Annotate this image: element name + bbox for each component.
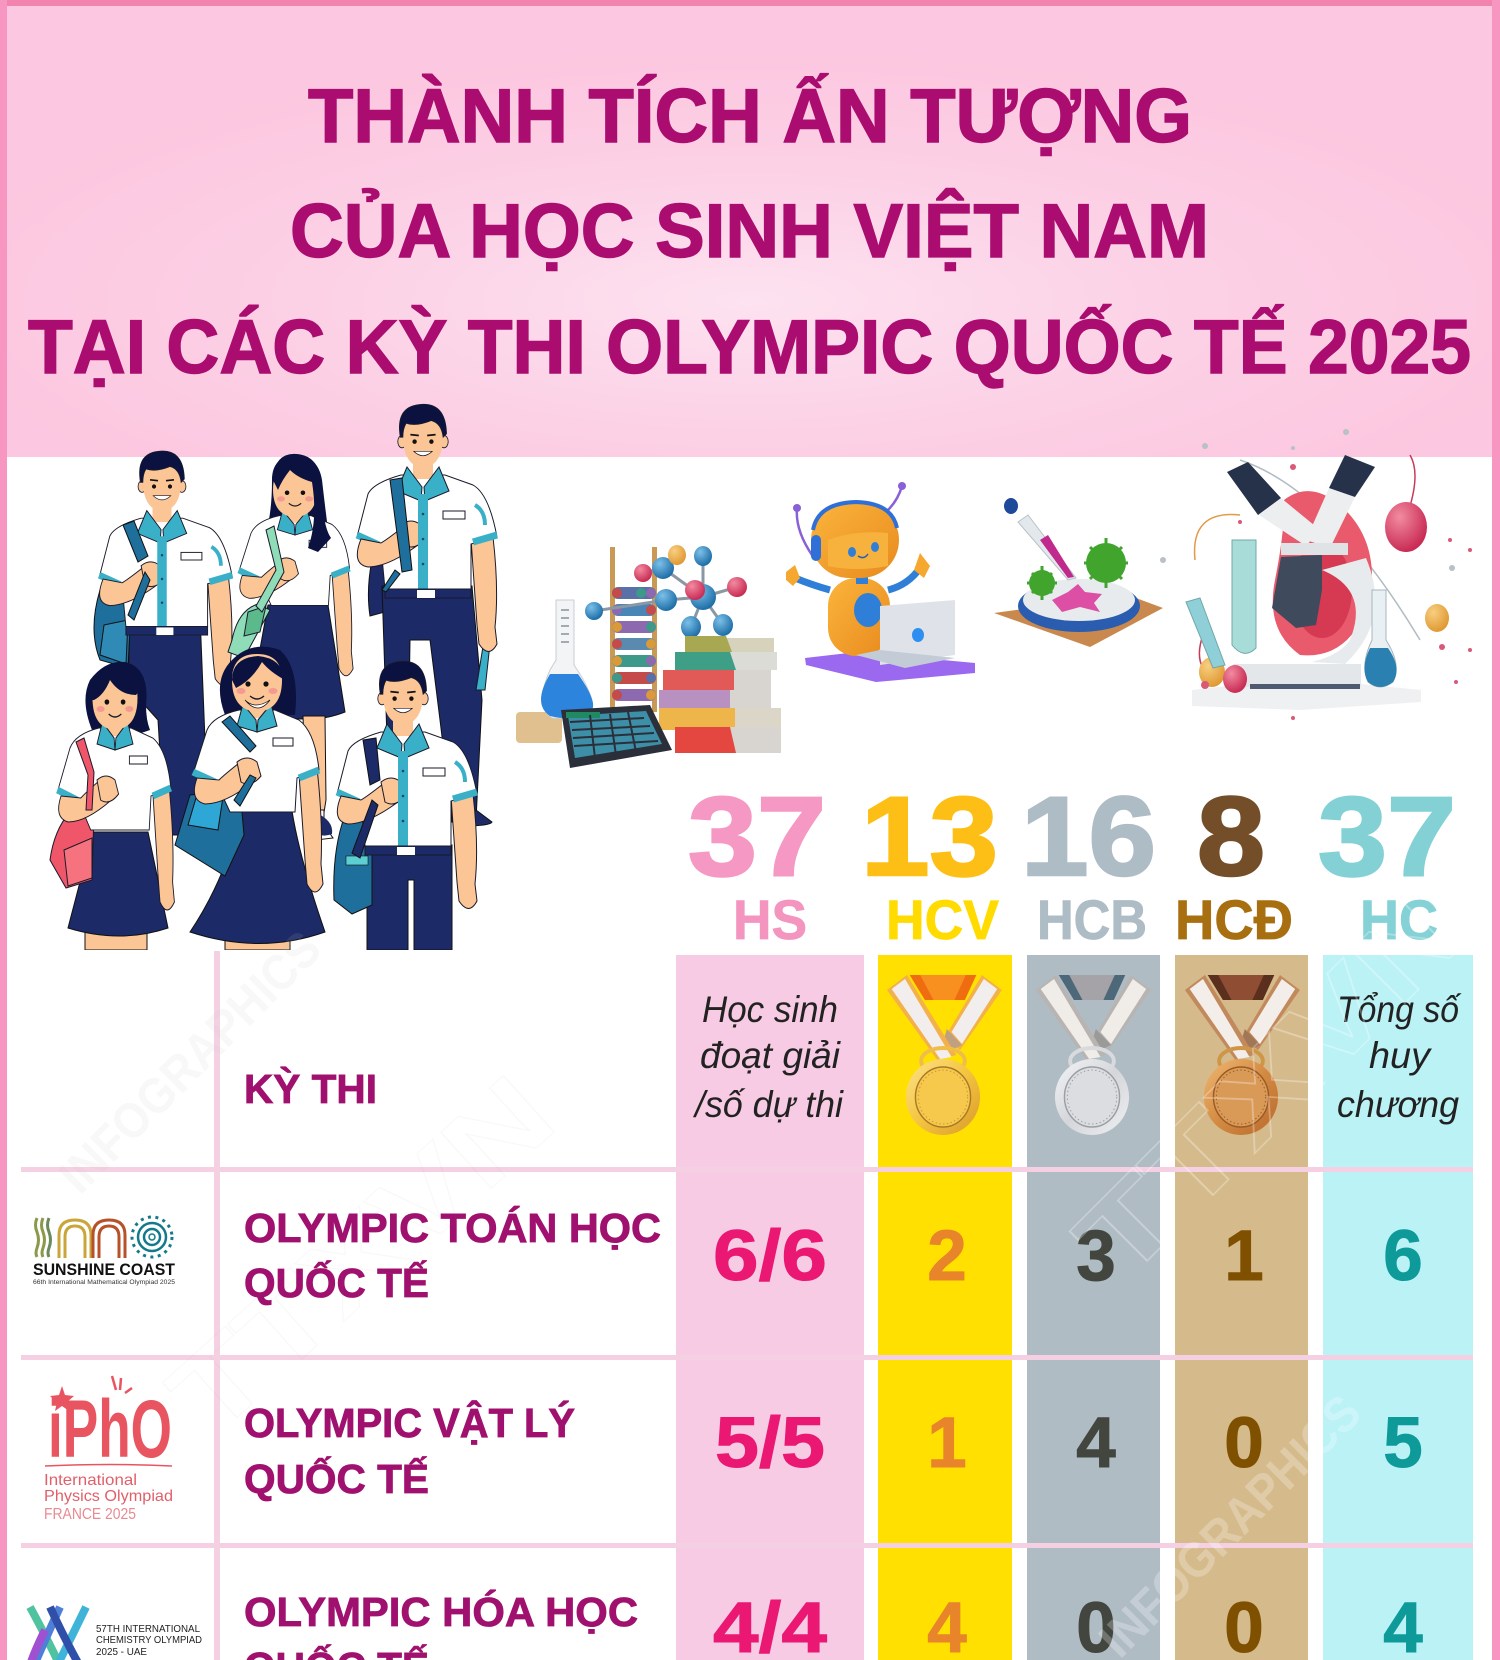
title bbox=[28, 74, 1471, 390]
logo: IPhO bbox=[44, 1376, 173, 1523]
big number: 13 gold: 13 bbox=[861, 774, 998, 899]
student: boy back left bbox=[94, 451, 232, 835]
value: gold: 2 bbox=[927, 1217, 967, 1296]
big number: 16 silver bbox=[1027, 795, 1153, 940]
value: total: 5 bbox=[1383, 1404, 1423, 1483]
label: HS: HS bbox=[733, 888, 807, 951]
big number: 37 students bbox=[689, 796, 822, 940]
illustration: petri dish and dropper bbox=[994, 498, 1163, 647]
illustration: robot with laptop bbox=[786, 482, 975, 682]
value: gold: 1 bbox=[927, 1404, 967, 1483]
column header: total medals note: Tổng số bbox=[1337, 989, 1462, 1030]
student: girl front middle bbox=[175, 647, 325, 950]
watermark: INFOGRAPHICS bbox=[1088, 1384, 1372, 1660]
column header: students note: Học sinh bbox=[702, 989, 838, 1030]
exam name: chemistry: OLYMPIC HÓA HỌC bbox=[244, 1589, 638, 1635]
logo: Sunshine Coast IMO bbox=[33, 1217, 176, 1286]
logo: IPhO: International bbox=[44, 1472, 137, 1489]
icon: gold medal bbox=[887, 975, 1002, 1135]
value: bronze: 1 bbox=[1224, 1217, 1264, 1296]
title: TẠI CÁC KỲ THI OLYMPIC QUỐC TẾ 2025 bbox=[28, 305, 1471, 390]
abacus bbox=[610, 547, 657, 712]
icon: silver medal bbox=[1036, 975, 1151, 1135]
value: students: 6/6 bbox=[713, 1217, 827, 1296]
watermark: TTXVN bbox=[146, 1052, 577, 1458]
flask bbox=[541, 600, 593, 718]
row: chemistry olympiad bbox=[30, 1589, 1423, 1660]
big number: 13 gold bbox=[867, 796, 1000, 940]
table: column backgrounds bbox=[676, 955, 1473, 1660]
illustration: microscope bbox=[1160, 429, 1472, 720]
logo: Sunshine Coast IMO: SUNSHINE COAST bbox=[33, 1260, 176, 1279]
big number: 37 total medals: 37 bbox=[1318, 774, 1456, 899]
label: HCV: HCV bbox=[886, 888, 999, 951]
watermark bbox=[48, 862, 1493, 1660]
label: HCĐ: HCĐ bbox=[1175, 888, 1293, 951]
microscope base bbox=[1192, 664, 1421, 710]
big number: 37 total medals bbox=[1319, 796, 1452, 940]
logo: IChO UAE bbox=[30, 1607, 202, 1660]
row: math olympiad bbox=[33, 1205, 1423, 1306]
logo: IPhO: Physics Olympiad bbox=[44, 1488, 173, 1505]
student: girl back middle bbox=[228, 454, 353, 840]
exam name: chemistry bbox=[244, 1589, 638, 1660]
column header: students note: đoạt giải bbox=[700, 1035, 842, 1076]
microscope arms bbox=[1259, 488, 1355, 555]
wood block bbox=[516, 712, 562, 743]
exam name: math: OLYMPIC TOÁN HỌC bbox=[244, 1205, 661, 1251]
column header: KỲ THI: KỲ THI bbox=[244, 1066, 377, 1112]
header banner bbox=[0, 0, 1500, 457]
student: boy front right bbox=[334, 661, 477, 950]
big number: 8 bronze bbox=[1178, 795, 1292, 940]
big number: 16 silver: 16 bbox=[1021, 774, 1156, 899]
column header: total medals note: chương bbox=[1337, 1084, 1459, 1125]
big number: 37 students: 37 bbox=[688, 774, 826, 899]
student: girl front left bbox=[50, 662, 174, 950]
illustration: group of students bbox=[50, 404, 497, 950]
value: total: 6 bbox=[1383, 1217, 1423, 1296]
label: HCB: HCB bbox=[1037, 888, 1147, 951]
column header: total medals note: huy bbox=[1369, 1035, 1433, 1076]
exam name: math bbox=[244, 1205, 661, 1306]
value: students: 5/5 bbox=[715, 1404, 825, 1483]
title: THÀNH TÍCH ẤN TƯỢNG bbox=[308, 74, 1192, 159]
watermark: INFOGRAPHICS bbox=[48, 920, 332, 1204]
logo: Sunshine Coast IMO: 66th International Mathematical Olympiad 2025 bbox=[33, 1280, 176, 1286]
label: HC: HC bbox=[1360, 888, 1438, 951]
title: CỦA HỌC SINH VIỆT NAM bbox=[290, 188, 1209, 274]
logo: IPhO: FRANCE 2025 bbox=[44, 1506, 136, 1523]
logo: IPhO: iPhO bbox=[48, 1384, 172, 1475]
value: bronze: 0 bbox=[1224, 1404, 1264, 1483]
table: grid lines bbox=[21, 951, 1473, 1660]
icon: bronze medal bbox=[1185, 975, 1300, 1135]
logo: IChO UAE: CHEMISTRY OLYMPIAD bbox=[96, 1634, 202, 1646]
molecule bbox=[585, 545, 747, 636]
exam name: math: QUỐC TẾ bbox=[244, 1260, 429, 1306]
value: silver: 3 bbox=[1076, 1217, 1116, 1296]
student: boy back right bbox=[357, 404, 497, 826]
illustration: math and chemistry stack bbox=[516, 545, 781, 768]
big number: 8 bronze: 8 bbox=[1197, 774, 1265, 899]
calculator bbox=[561, 705, 672, 768]
exam name: physics bbox=[244, 1400, 575, 1502]
exam name: physics: OLYMPIC VẬT LÝ bbox=[244, 1400, 575, 1446]
watermark: TTXVN bbox=[1052, 862, 1493, 1303]
microscope eyepieces bbox=[1227, 455, 1375, 515]
logo: IChO UAE: 2025 - UAE bbox=[96, 1646, 147, 1658]
row: physics olympiad bbox=[44, 1376, 1423, 1523]
column header: students note bbox=[692, 989, 845, 1125]
value: silver: 4 bbox=[1076, 1404, 1116, 1483]
book stack bbox=[659, 636, 781, 753]
logo: IChO UAE: 57TH INTERNATIONAL bbox=[96, 1623, 200, 1635]
column header: students note: /số dự thi bbox=[692, 1084, 845, 1125]
exam name: physics: QUỐC TẾ bbox=[244, 1456, 429, 1502]
column header: total medals note bbox=[1337, 989, 1462, 1125]
